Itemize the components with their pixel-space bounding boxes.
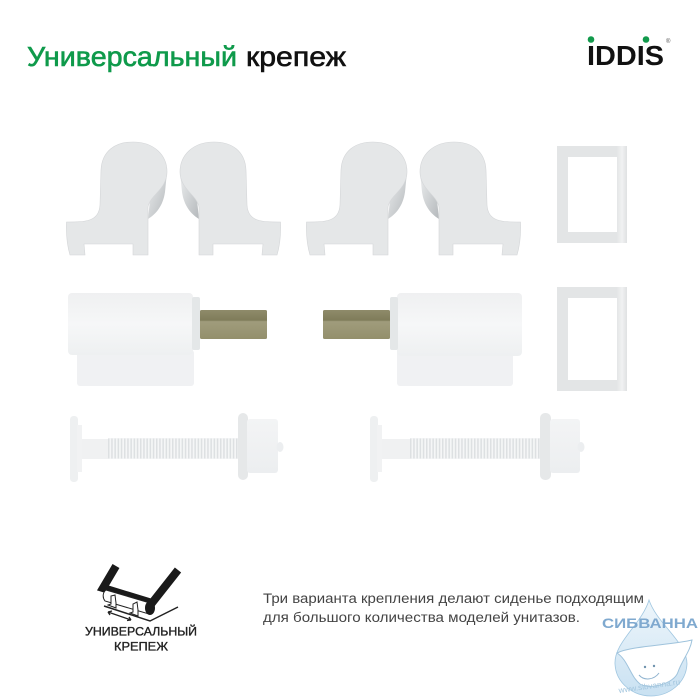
gasket: bottom bbox=[557, 287, 627, 391]
icon caption: УНИВЕРСАЛЬНЫЙ bbox=[85, 624, 197, 638]
clips: first pair bbox=[66, 142, 281, 255]
gasket: top bbox=[557, 146, 627, 243]
icon caption: КРЕПЕЖ bbox=[114, 640, 168, 654]
logo: IDDIS: ® bbox=[666, 38, 671, 45]
watermark: Sibvanna bbox=[602, 600, 698, 696]
watermark drop bbox=[615, 600, 687, 696]
icon caption bbox=[85, 624, 197, 654]
description text bbox=[263, 591, 644, 625]
description text: для большого количества моделей унитазов. bbox=[263, 610, 580, 625]
watermark url: www.sibvanna.ru bbox=[617, 677, 681, 695]
watermark wordmark: СИБВАННА bbox=[602, 616, 698, 631]
watermark bath face bbox=[639, 665, 659, 679]
title: крепеж bbox=[246, 41, 347, 72]
hinge: right bbox=[323, 293, 522, 386]
screw: left bbox=[70, 413, 284, 482]
watermark bath bbox=[617, 640, 692, 686]
hinge: left bbox=[68, 293, 267, 386]
screw: right bbox=[370, 413, 584, 482]
title: Универсальный bbox=[27, 41, 237, 72]
title bbox=[27, 41, 347, 72]
logo: IDDIS: IDDIS bbox=[587, 40, 664, 71]
clips: second pair bbox=[306, 142, 521, 255]
description text: Три варианта крепления делают сиденье подходящим bbox=[263, 591, 644, 606]
icon: universal fastening bbox=[103, 566, 178, 621]
